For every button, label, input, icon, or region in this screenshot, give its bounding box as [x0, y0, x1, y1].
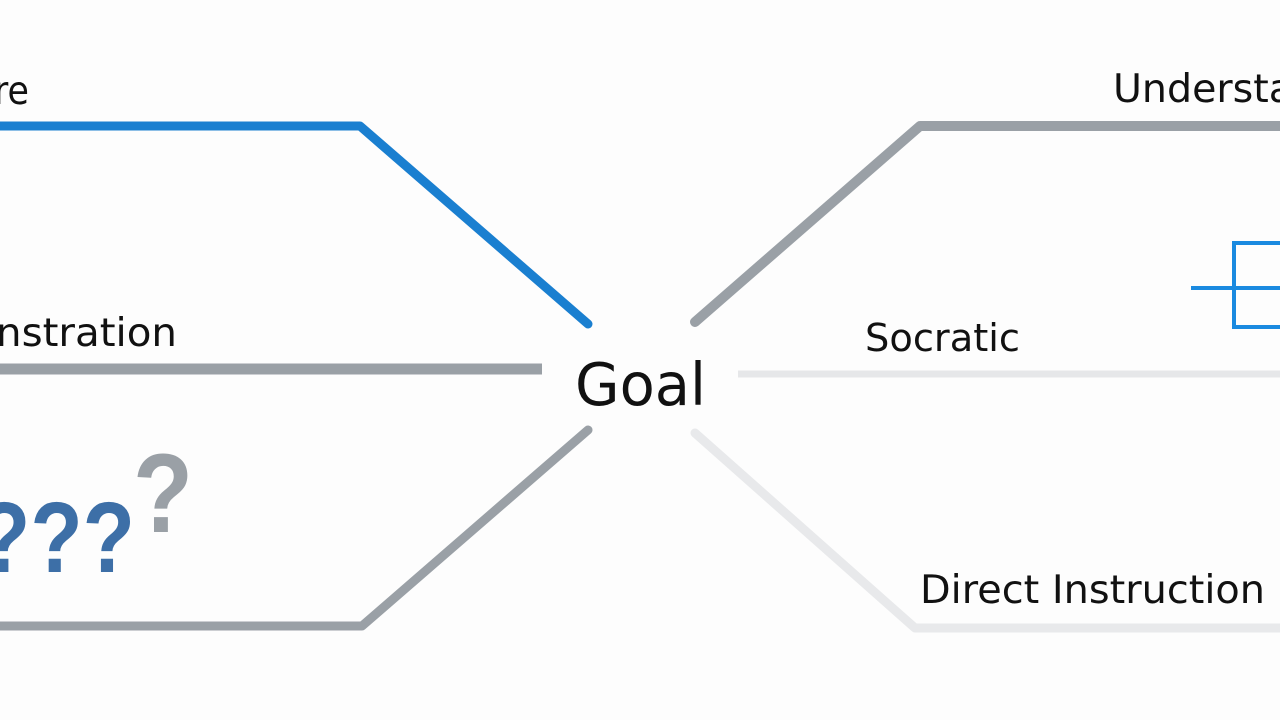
label: demonstration: nstration	[0, 311, 177, 356]
branch: bottom-right light	[695, 433, 1280, 628]
label: socratic: Socratic	[865, 316, 1020, 360]
label: direct instruction: Direct Instruction	[920, 568, 1265, 613]
branch: top-left blue	[0, 126, 588, 324]
icon: question marks: ?	[133, 431, 193, 556]
icon: question marks	[0, 431, 193, 594]
center: goal: Goal	[575, 350, 706, 419]
branch: middle-right light	[738, 370, 1280, 378]
branch: middle-left gray	[0, 364, 542, 374]
icon: blue grid	[1191, 243, 1280, 327]
branch: top-right gray	[695, 126, 1280, 322]
branch: bottom-left gray	[0, 430, 588, 626]
